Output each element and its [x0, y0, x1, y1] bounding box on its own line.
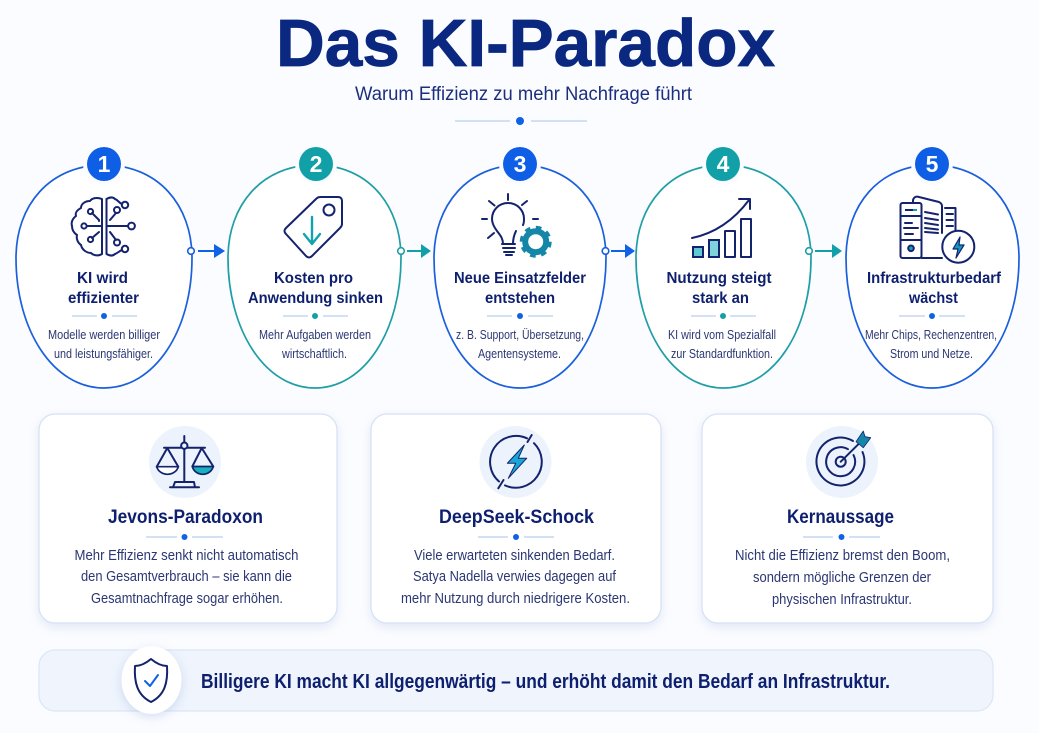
- step title: effizienter: [68, 290, 139, 307]
- step description: [865, 328, 997, 361]
- step description: wirtschaftlich.: [281, 347, 347, 361]
- step description: Modelle werden billiger: [48, 328, 160, 342]
- card heading: Jevons-Paradoxon: [108, 506, 263, 528]
- badge 5: 5: [926, 151, 939, 177]
- step title: wächst: [908, 290, 959, 307]
- step description: und leistungsfähiger.: [54, 347, 153, 361]
- banner text: Billigere KI macht KI allgegenwärtig – und erhöht damit den Bedarf an Infrastruktur.: [201, 671, 890, 693]
- icon: shield with check: [122, 646, 182, 714]
- step description: Agentensysteme.: [478, 347, 561, 361]
- badge 2: 2: [310, 151, 322, 177]
- step title: KI wird: [77, 270, 128, 287]
- badge 2: [299, 147, 333, 181]
- divider: [691, 313, 756, 319]
- card text: Satya Nadella verwies dagegen auf: [413, 569, 617, 585]
- arrow 1 to 2: [188, 244, 225, 258]
- step title: [666, 270, 772, 307]
- card text: sondern mögliche Grenzen der: [753, 570, 931, 586]
- step description: [668, 328, 776, 361]
- card text: Viele erwarteten sinkenden Bedarf.: [414, 548, 615, 564]
- step description: [259, 328, 371, 361]
- card text: [735, 548, 950, 608]
- step title: [248, 270, 383, 307]
- divider: [146, 534, 223, 540]
- step title: Kosten pro: [274, 270, 353, 287]
- step title: Anwendung sinken: [248, 290, 383, 307]
- step title: stark an: [692, 290, 749, 307]
- panel: Kernaussage: [702, 414, 993, 623]
- step 1: KI wird effizienter: [16, 143, 192, 388]
- panel: DeepSeek-Schock: [371, 414, 661, 623]
- badge 4: 4: [717, 151, 730, 177]
- divider: [899, 313, 965, 319]
- arrow 2 to 3: [398, 244, 431, 258]
- card text: mehr Nutzung durch niedrigere Kosten.: [401, 591, 630, 607]
- card heading: DeepSeek-Schock: [439, 506, 594, 528]
- step description: Mehr Aufgaben werden: [259, 328, 371, 342]
- step description: KI wird vom Spezialfall: [668, 328, 776, 342]
- step description: z. B. Support, Übersetzung,: [456, 328, 584, 342]
- step 3: Neue Einsatzfelder entstehen: [434, 143, 606, 388]
- card text: [74, 548, 298, 607]
- card heading: Kernaussage: [787, 506, 894, 528]
- step title: Nutzung steigt: [666, 270, 772, 287]
- badge 4: [706, 147, 740, 181]
- icon: brain: [72, 198, 135, 256]
- card text: den Gesamtverbrauch – sie kann die: [81, 569, 292, 585]
- card text: Nicht die Effizienz bremst den Boom,: [735, 548, 950, 564]
- divider: [487, 313, 553, 319]
- step title: [68, 270, 139, 307]
- badge 1: 1: [98, 151, 111, 177]
- step description: zur Standardfunktion.: [671, 347, 773, 361]
- step description: Mehr Chips, Rechenzentren,: [865, 328, 997, 342]
- step title: [867, 270, 1002, 307]
- card text: physischen Infrastruktur.: [772, 592, 912, 608]
- divider: [283, 313, 348, 319]
- step title: [454, 270, 586, 307]
- step 5: Infrastrukturbedarf wächst: [846, 143, 1019, 388]
- step description: [48, 328, 160, 361]
- step 2: Kosten pro Anwendung sinken: [228, 143, 401, 388]
- card text: [401, 548, 630, 607]
- step description: [456, 328, 584, 361]
- divider: [803, 534, 880, 540]
- step description: Strom und Netze.: [890, 347, 973, 361]
- divider: [478, 534, 554, 540]
- title: Das KI-Paradox: [276, 6, 775, 81]
- badge 1: [87, 147, 121, 181]
- arrow 4 to 5: [806, 244, 842, 258]
- step title: entstehen: [485, 290, 555, 307]
- badge 3: [503, 147, 537, 181]
- icon: balance scale: [157, 436, 213, 487]
- arrow 3 to 4: [602, 244, 635, 258]
- panel: Jevons-Paradoxon: [39, 414, 337, 623]
- divider: [72, 313, 137, 319]
- icon: price tag: [284, 197, 342, 258]
- card text: Gesamtnachfrage sogar erhöhen.: [91, 591, 283, 607]
- badge 5: [915, 147, 949, 181]
- icon: growth chart: [692, 199, 751, 257]
- icon: lightning in broken ring: [490, 435, 542, 488]
- icon: target with arrow: [816, 431, 871, 485]
- card text: Mehr Effizienz senkt nicht automatisch: [74, 548, 298, 564]
- step title: Neue Einsatzfelder: [454, 270, 586, 287]
- step 4: Nutzung steigt stark an: [636, 143, 811, 388]
- banner: conclusion: [39, 646, 993, 714]
- subtitle: Warum Effizienz zu mehr Nachfrage führt: [355, 84, 693, 105]
- title divider: [455, 117, 587, 125]
- step title: Infrastrukturbedarf: [867, 270, 1002, 287]
- icon: servers with power bolt: [900, 197, 974, 263]
- badge 3: 3: [514, 151, 526, 177]
- icon: light bulb and gear: [482, 194, 550, 256]
